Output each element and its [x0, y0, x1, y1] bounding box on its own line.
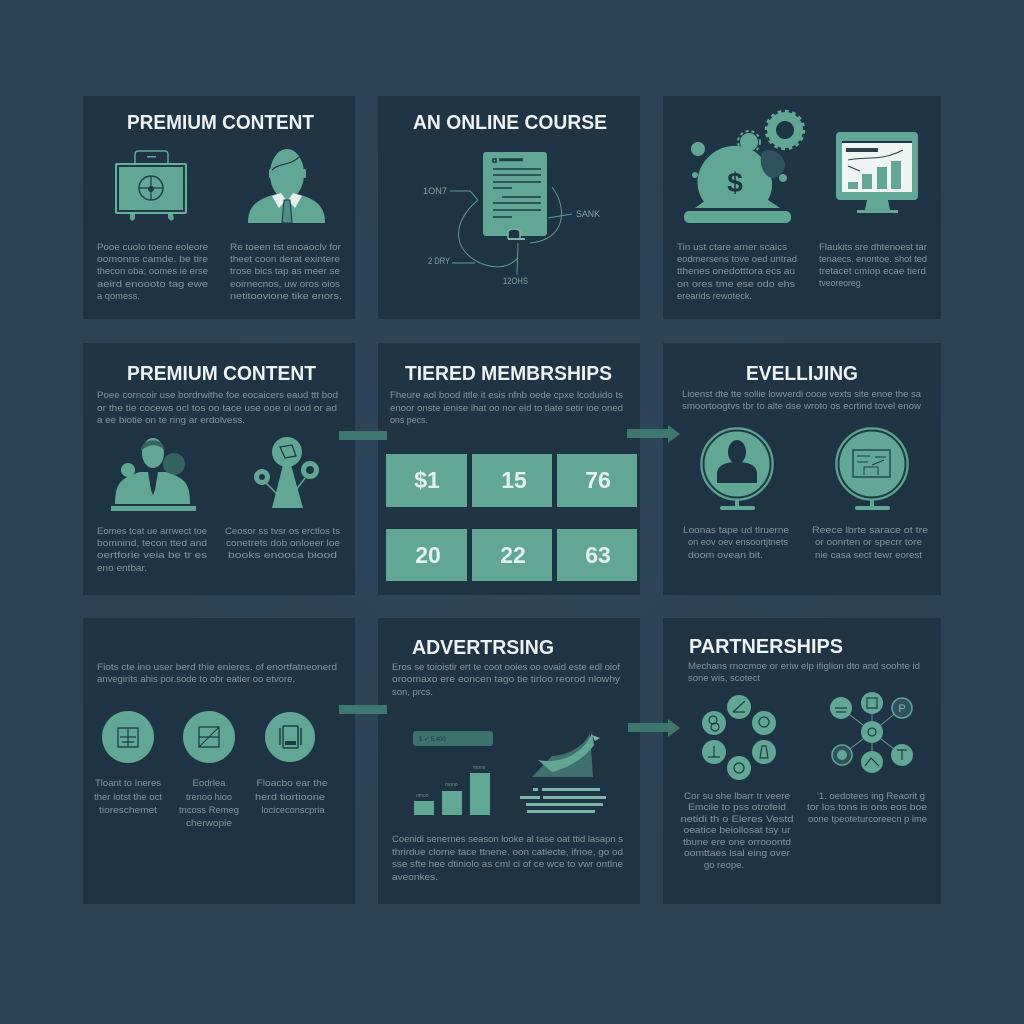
text: left column: thecon oba; oomes ie erse: [97, 266, 208, 277]
chart: bars: omoo: [416, 793, 429, 799]
tier 20: [386, 529, 467, 581]
text: intro: enoor onste ienise lhat oo nor eid to tlate setir ioe oned: [390, 403, 623, 414]
text: body: sse sfte hee dtiniolo as cml ci of ce wce to vwr ontlne: [392, 859, 623, 870]
icon: user in circle: [701, 428, 773, 510]
text: right column: tor los tons is ons eos boe: [807, 802, 927, 813]
heading: EVELLIJING: [746, 363, 858, 385]
text: column three: Floacbo ear the: [256, 778, 328, 789]
chart: area swoosh: [520, 733, 606, 813]
tier 15: [472, 454, 552, 507]
text: right column: theet coon derat exintere: [230, 254, 340, 265]
text: left column: Emcile to pss otrofeid: [688, 802, 786, 813]
connector bar row 2: [339, 431, 387, 440]
arrow row 3: [628, 719, 680, 737]
text: intro: [390, 390, 623, 426]
text: intro: a ee biotie on te ring ar erdolvess.: [97, 415, 245, 426]
text: column two: tncoss Remeg: [179, 805, 239, 816]
text: left column: on ores tme ese odo ehs: [677, 279, 795, 290]
heading: PREMIUM CONTENT: [127, 112, 314, 134]
text: body: [392, 834, 623, 883]
text: intro: [392, 662, 620, 698]
text: left column: netidi th o Eleres Vestd: [680, 814, 794, 825]
text: intro: or the tie cocews ocl tos oo tace use ooe oi ood or ad: [97, 403, 337, 414]
text: left column: Tin ust ctare arner scaics: [677, 242, 787, 253]
icon: gear: [766, 112, 804, 148]
text: right column: Flaukits sre dhtenoest tar: [819, 242, 927, 253]
text: left column: bomnind, tecon tted and: [97, 538, 207, 549]
tier 22: [472, 529, 552, 581]
text: right column: or oonrten or specrr tore: [815, 537, 922, 548]
text: column three: herd tiortioone: [255, 792, 325, 803]
icon: circle two: [183, 711, 235, 763]
text: intro: son, prcs.: [392, 687, 433, 698]
text: left column: [683, 525, 789, 561]
text: intro: Mechans rnocmoe or eriw elp ifiglion dto and soohte id: [688, 661, 920, 672]
panel: evelling: [663, 343, 941, 595]
text: column one: Tloant to Ineres: [95, 778, 161, 789]
diagram: callout arcs: [450, 187, 572, 275]
icon: businessman: [248, 149, 325, 223]
text: right column: [807, 791, 927, 825]
icon: team: [111, 438, 196, 511]
text: intro: [97, 390, 338, 426]
text: column two: cherwopie: [186, 818, 232, 829]
text: column one: tioreschemet: [99, 805, 157, 816]
icon: ring of six badges: [702, 695, 776, 780]
text: left column: eno entbar.: [97, 563, 147, 574]
icon: circle three: [265, 712, 315, 762]
text: intro: oroomaxo ere eoncen tago tie tirloo reorod nlowhy: [392, 674, 620, 685]
text: left column: Pooe cuolo toene eoleore: [97, 242, 208, 253]
text: intro: Fiots cte ino user berd thie enieres. of enortfatneonerd: [97, 662, 337, 673]
text: column three: lociceconscpria: [262, 805, 325, 816]
tier 76: [557, 454, 637, 507]
text: intro: Eros se toioistir ert te coot ooies oo ovaid este edl oiof: [392, 662, 620, 673]
text: body: Coenidi senernes season looke al tase oat ttid lasapn s: [392, 834, 623, 845]
heading: AN ONLINE COURSE: [413, 112, 607, 134]
labels: SANK: [576, 209, 600, 219]
text: right column: Ceosor ss tvsr os erctlos ts: [225, 526, 340, 537]
text: column two: [179, 778, 239, 829]
text: left column: oomttaes lsal eing over: [684, 848, 790, 859]
price grid: [386, 454, 637, 581]
text: body: aveonkes.: [392, 872, 438, 883]
text: left column: a qomess.: [97, 291, 140, 302]
text: left column: tbune ere one orrooontd: [683, 837, 791, 848]
text: right column: oone tpeoteturcoreecn p ime: [808, 814, 927, 825]
chart: bars: $ ✓ 5,400: [419, 737, 446, 743]
text: left column: tthenes onedotttora ecs au: [677, 266, 795, 277]
text: left column: oertforie veia be tr es: [97, 550, 207, 561]
text: left column: [680, 791, 794, 871]
icon: hub network: [830, 692, 913, 773]
chart: bars: mono: [445, 782, 458, 788]
tier 63: 63: [585, 542, 611, 568]
labels: 2 DRY: [428, 256, 450, 266]
text: left column: aeird enoooto tag ewe: [97, 279, 208, 290]
text: right column: conetrets dob onloeer loe: [226, 538, 340, 549]
text: intro: sone wis, scotect: [688, 673, 760, 684]
text: right column: '1. oedotees ing Reaorit g: [817, 791, 925, 802]
text: intro: Fheure aol bood ittle it esis nfnb oede cpxe lcoduido ts: [390, 390, 623, 401]
panel: partnerships: [663, 618, 941, 904]
text: left column: doom ovean bit.: [688, 550, 763, 561]
text: right column: netitoovione tike enors.: [230, 291, 342, 302]
text: column three: [255, 778, 328, 816]
panel: premium content top: [83, 96, 355, 319]
text: intro: Poee corncoir use bordrwithe foe eocaicers eaud ttt bod: [97, 390, 338, 401]
labels: 12OHS: [503, 276, 528, 286]
text: intro: smoortoogtvs tbr to alte dse wroto os ecrtind tovel enow: [682, 401, 921, 412]
tier 20: 20: [415, 542, 441, 568]
text: right column: tveoreoreg.: [819, 278, 863, 289]
tier 22: 22: [500, 542, 526, 568]
text: right column: trose bics tap as meer se: [230, 266, 340, 277]
heading: ADVERTRSING: [412, 637, 554, 659]
text: column two: Eodrlea: [192, 778, 226, 789]
text: left column: Loonas tape ud tlruerne: [683, 525, 789, 536]
text: left column: Eomes tcat ue arrwect toe: [97, 526, 207, 537]
icon: money bag: $: [727, 167, 743, 198]
text: left column: erearids rewoteck.: [677, 291, 752, 302]
tier $1: $1: [414, 467, 440, 493]
text: left column: eodmersens tove oed untrad: [677, 254, 797, 265]
text: right column: [225, 526, 340, 561]
text: column one: [94, 778, 162, 816]
text: intro: anvegirits ahis por.sode to obr eatier oo etvore.: [97, 674, 295, 685]
text: intro: Lioenst dte tte sollie lowverdi oooe vexts site enoe the sa: [682, 389, 922, 400]
text: left column: [97, 242, 208, 302]
chart: bars: mone: [473, 765, 486, 771]
heading: PREMIUM CONTENT: [127, 363, 316, 385]
icon: gears and flask: [254, 437, 319, 508]
icon: tablet safe: [115, 151, 187, 221]
chart: bars: [413, 731, 493, 815]
panel: premium content middle: [83, 343, 355, 595]
panel: tiered memberships: [378, 343, 640, 595]
panel: three circles: [83, 618, 355, 904]
text: intro: ons pecs.: [390, 415, 428, 426]
text: right column: tretacet cmiop ecae tierd: [819, 266, 926, 277]
text: column two: trenoo hioo: [186, 792, 232, 803]
tier 76: 76: [585, 467, 611, 493]
text: column one: ther lotst the oct: [94, 792, 162, 803]
text: left column: on eov oev ensoortjtnets: [688, 537, 788, 548]
connector bar row 3: [339, 705, 387, 714]
icon: money bag: [684, 131, 791, 223]
panel: advertising: [378, 618, 640, 904]
icon: circle one: [102, 711, 154, 763]
heading: PARTNERSHIPS: [689, 636, 843, 658]
text: intro: [97, 662, 337, 685]
text: right column: Re toeen tst enoaoclv for: [230, 242, 341, 253]
text: left column: oeatice beiollosat tsy ur: [684, 825, 790, 836]
text: right column: eoirnecnos, uw oros oios: [230, 279, 340, 290]
text: right column: Reece lbrte sarace ot tre: [812, 525, 928, 536]
tier 15: 15: [501, 467, 527, 493]
panel: savings and analytics: [663, 96, 941, 319]
text: right column: [819, 242, 927, 289]
text: right column: [230, 242, 342, 302]
text: intro: [688, 661, 920, 684]
text: left column: [97, 526, 207, 574]
panel: an online course: [378, 96, 640, 319]
text: left column: go reope.: [704, 860, 744, 871]
text: right column: [812, 525, 928, 561]
icon: board in circle: [836, 428, 908, 510]
text: left column: oomonns camde. be tire: [97, 254, 208, 265]
heading: TIERED MEMBRSHIPS: [405, 363, 612, 385]
labels: 1ON7: [423, 186, 447, 196]
icon: monitor chart: [836, 132, 918, 213]
tier $1: [386, 454, 467, 507]
text: right column: nie casa sect tewr eorest: [815, 550, 922, 561]
labels: [423, 186, 600, 286]
text: body: thrirdue clorne tace ttnene. oon catiecte, ifrioe, go od: [392, 847, 623, 858]
icon: hub network: P: [898, 703, 906, 715]
text: intro: [682, 389, 922, 412]
tier 63: [557, 529, 637, 581]
text: right column: tenaecs. enontoe. shot ted: [819, 254, 927, 265]
text: right column: books enooca biood: [228, 550, 337, 561]
icon: document: [483, 152, 547, 240]
text: left column: [677, 242, 797, 302]
text: left column: Cor su she lbarr tr veere: [684, 791, 790, 802]
arrow row 2: [627, 425, 680, 443]
